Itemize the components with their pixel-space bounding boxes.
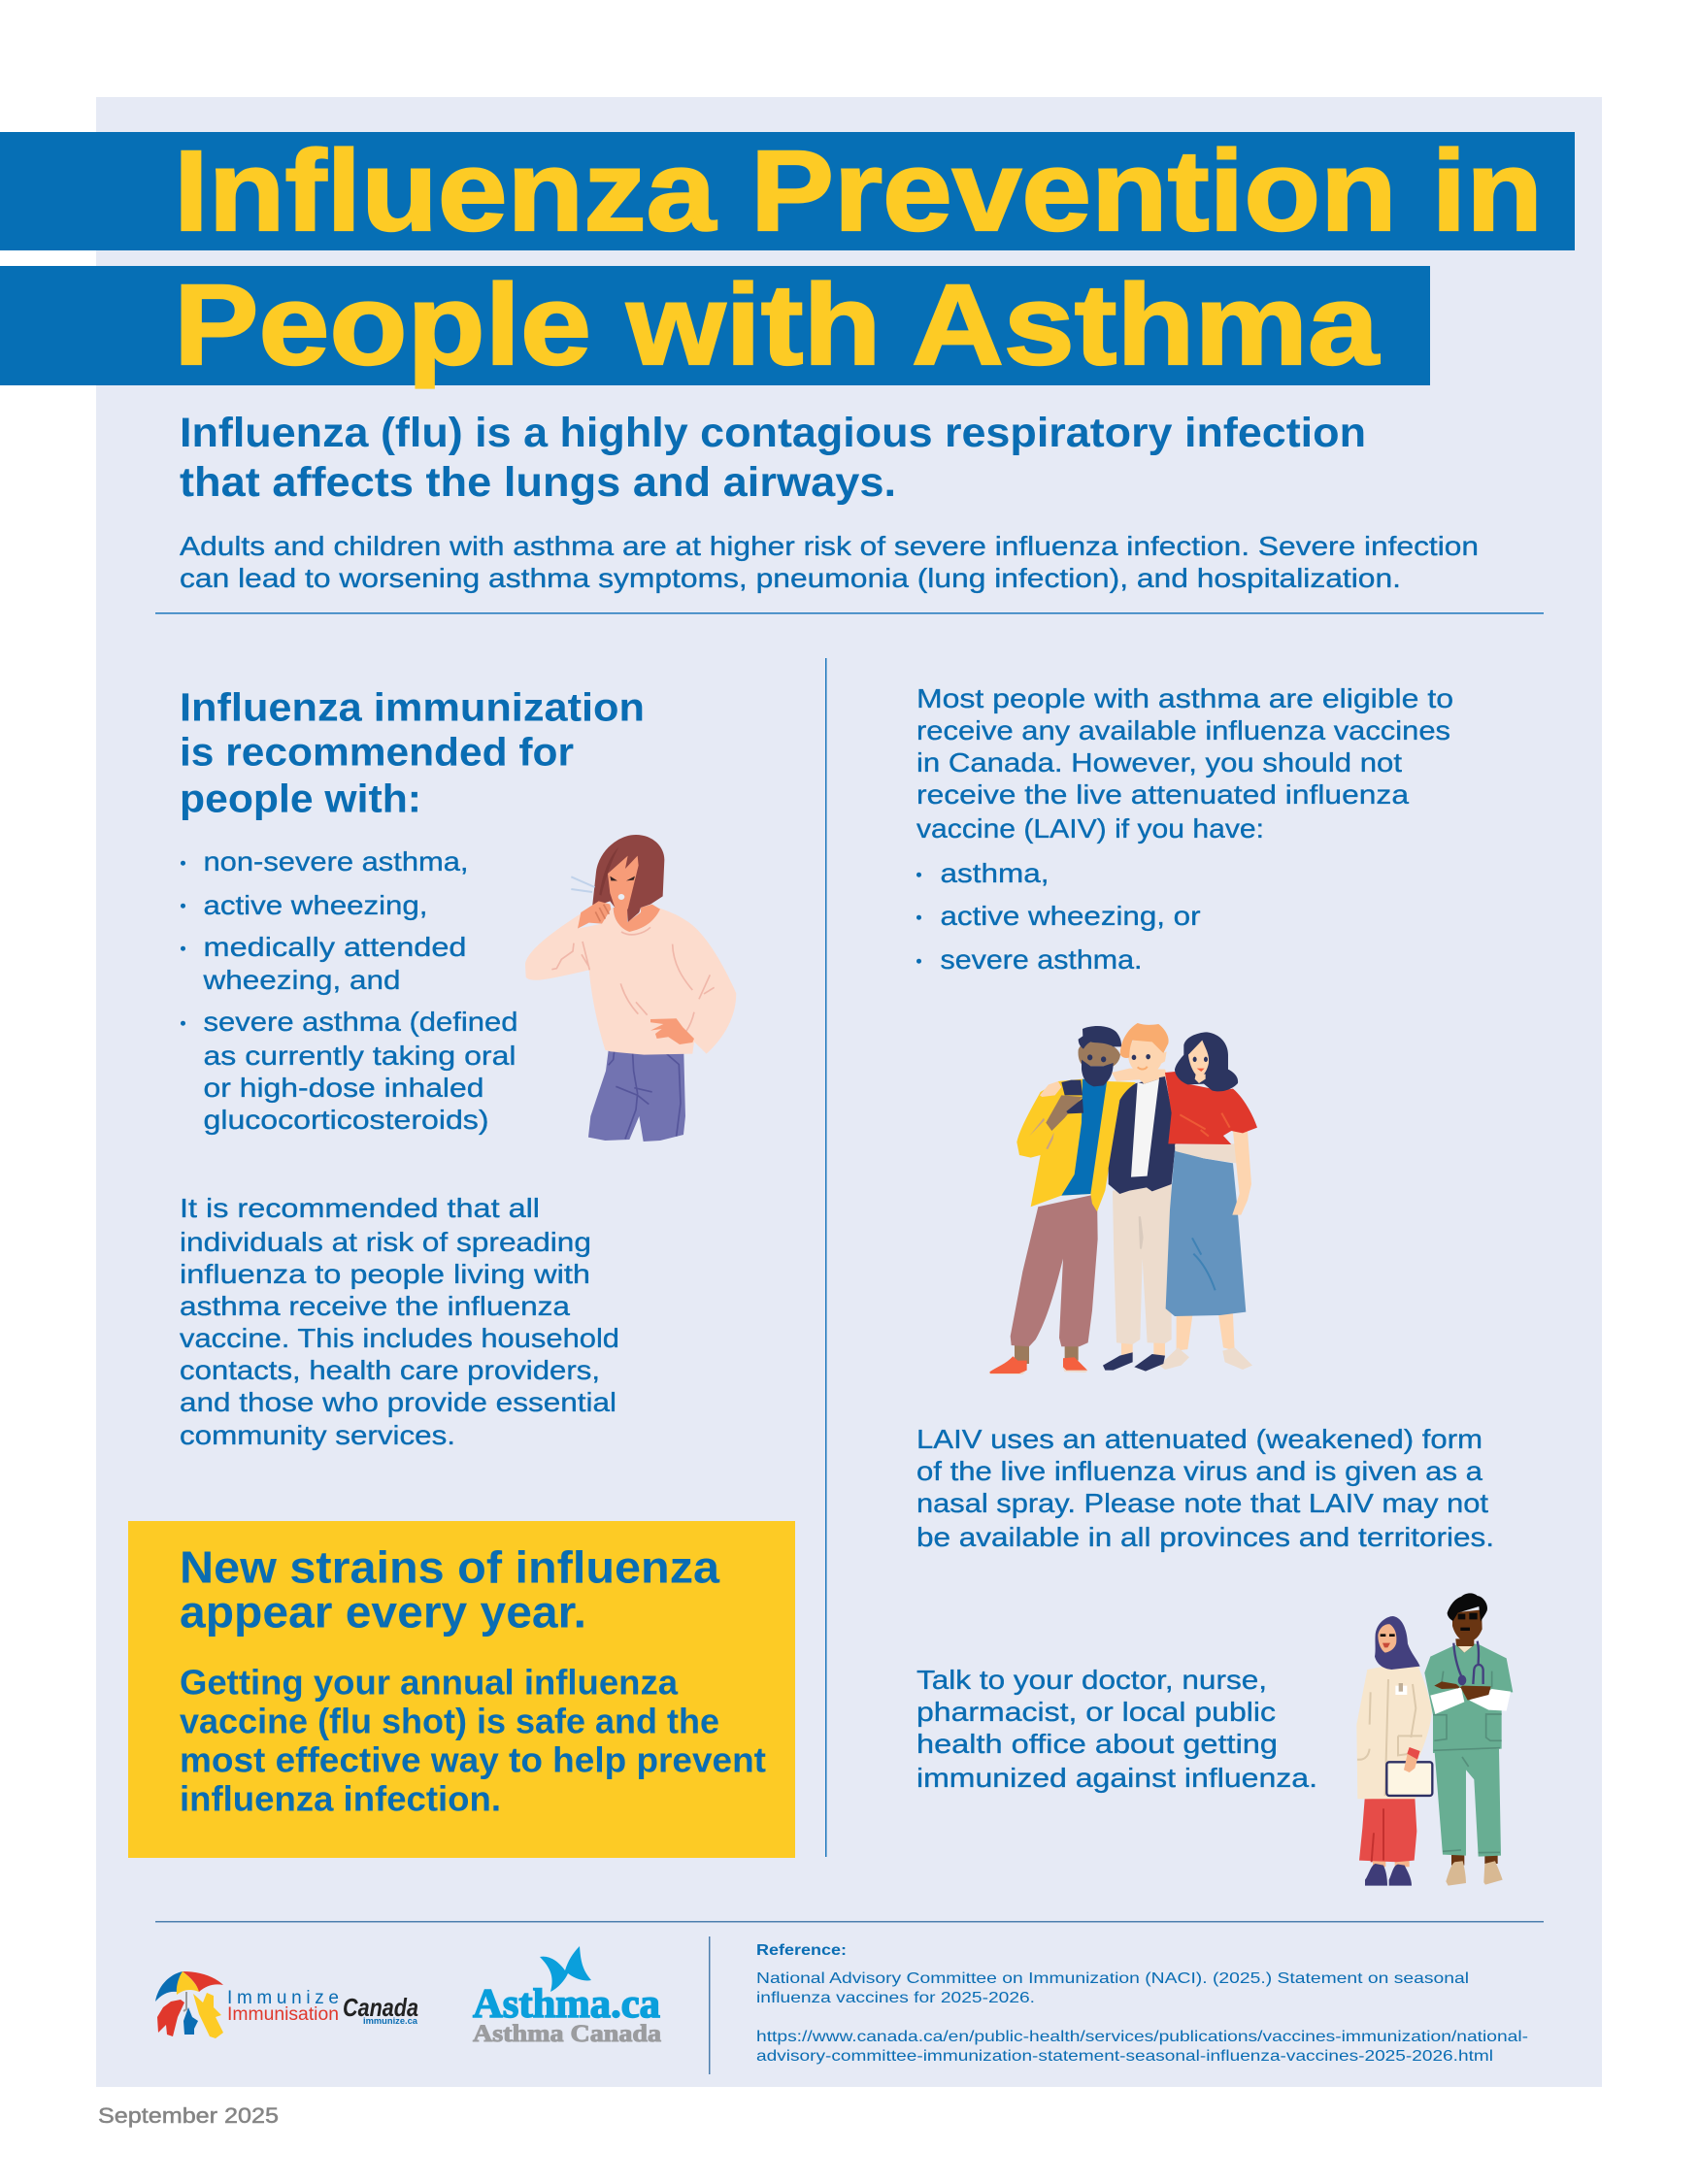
callout: new strains: vaccine (flu shot) is safe and the <box>180 1701 719 1740</box>
callout: new strains: New strains of influenza <box>180 1541 719 1592</box>
paragraph: those spreading influenza: community services. <box>180 1420 455 1450</box>
list: people recommended <box>181 846 518 1135</box>
list: people recommended: medically attended <box>204 932 466 962</box>
title <box>0 127 1575 389</box>
paragraph: about LAIV: be available in all provinces and territories. <box>916 1522 1494 1552</box>
title: People with Asthma <box>174 261 1381 389</box>
paragraph: vaccine eligibility: Most people with asthma are eligible to <box>916 683 1453 713</box>
heading: immunization recommended: is recommended for <box>180 729 574 774</box>
paragraph: vaccine eligibility: in Canada. However, you should not <box>916 747 1402 778</box>
list: people recommended: severe asthma (defined <box>204 1007 518 1037</box>
paragraph: those spreading influenza: contacts, health care providers, <box>180 1355 600 1385</box>
callout: new strains: influenza infection. <box>180 1778 501 1818</box>
callout: new strains <box>128 1521 795 1858</box>
callout: new strains: Getting your annual influenza <box>180 1662 679 1702</box>
logo: Immunize Canada: Immunisation <box>227 2004 339 2025</box>
date: September 2025 <box>98 2103 279 2128</box>
list: LAIV exclusions: asthma, <box>940 858 1049 888</box>
logo: Asthma Canada <box>473 1946 662 2047</box>
list: people recommended: wheezing, and <box>202 965 400 995</box>
reference: advisory-committee-immunization-statement-seasonal-influenza-vaccines-2025-2026.html <box>756 2048 1493 2065</box>
logo: Asthma Canada: Asthma.ca <box>473 1982 660 2027</box>
logo: Immunize Canada <box>155 1971 418 2038</box>
logo: Immunize Canada: Canada <box>343 1993 418 2022</box>
paragraph: vaccine eligibility: vaccine (LAIV) if you have: <box>916 813 1264 844</box>
list: people recommended: active wheezing, <box>204 890 427 920</box>
paragraph: those spreading influenza: It is recommended that all <box>180 1193 540 1223</box>
heading: immunization recommended: Influenza immunization <box>180 684 645 729</box>
paragraph: about LAIV: nasal spray. Please note that LAIV may not <box>916 1488 1488 1518</box>
list: people recommended: non-severe asthma, <box>204 846 468 877</box>
logo: Asthma Canada: Asthma Canada <box>473 2021 662 2047</box>
paragraph: talk to your doctor: pharmacist, or local public <box>916 1697 1276 1727</box>
reference <box>756 1942 1528 2065</box>
heading: immunization recommended: people with: <box>180 776 421 820</box>
reference: Reference: <box>756 1942 847 1959</box>
reference: https://www.canada.ca/en/public-health/services/publications/vaccines-immunization/national- <box>756 2029 1528 2045</box>
paragraph: talk to your doctor: health office about getting <box>916 1729 1278 1759</box>
logo: Immunize Canada: Immunize <box>227 1988 339 2008</box>
paragraph: those spreading influenza: and those who provide essential <box>180 1387 616 1417</box>
subheading <box>180 410 1366 506</box>
paragraph: vaccine eligibility: receive the live attenuated influenza <box>916 779 1409 810</box>
subheading: that affects the lungs and airways. <box>180 459 896 506</box>
list: people recommended: or high-dose inhaled <box>204 1073 483 1103</box>
paragraph: those spreading influenza: influenza to people living with <box>180 1259 590 1289</box>
paragraph: those spreading influenza <box>180 1193 619 1450</box>
callout: new strains: most effective way to help prevent <box>180 1739 766 1779</box>
list: people recommended: glucocorticosteroids) <box>204 1105 489 1135</box>
list: LAIV exclusions <box>916 858 1200 975</box>
paragraph: talk to your doctor: immunized against influenza. <box>916 1763 1317 1793</box>
paragraph: about LAIV <box>916 1424 1494 1552</box>
subheading: Influenza (flu) is a highly contagious respiratory infection <box>180 410 1366 456</box>
icon: coughing woman <box>525 835 736 1142</box>
intro paragraph: Adults and children with asthma are at higher risk of severe influenza infection. Severe infection <box>180 531 1479 561</box>
paragraph: about LAIV: of the live influenza virus and is given as a <box>916 1456 1482 1486</box>
icon: health care workers <box>1356 1593 1513 1886</box>
logo: Immunize Canada: immunize.ca <box>363 2016 418 2026</box>
paragraph: vaccine eligibility <box>916 683 1453 844</box>
paragraph: talk to your doctor: Talk to your doctor, nurse, <box>916 1665 1267 1695</box>
paragraph: those spreading influenza: individuals at risk of spreading <box>180 1227 591 1257</box>
list: LAIV exclusions: active wheezing, or <box>940 901 1200 931</box>
heading: immunization recommended <box>180 684 645 820</box>
reference: National Advisory Committee on Immunization (NACI). (2025.) Statement on seasonal <box>756 1970 1469 1987</box>
reference: influenza vaccines for 2025-2026. <box>756 1990 1035 2006</box>
intro paragraph: can lead to worsening asthma symptoms, pneumonia (lung infection), and hospitalization. <box>180 563 1401 593</box>
list: people recommended: as currently taking oral <box>204 1041 516 1071</box>
icon: three friends <box>988 1023 1257 1374</box>
title: Influenza Prevention in <box>174 127 1543 255</box>
intro paragraph <box>180 531 1479 593</box>
paragraph: those spreading influenza: asthma receive the influenza <box>180 1291 570 1321</box>
list: LAIV exclusions: severe asthma. <box>940 944 1142 975</box>
callout: new strains: appear every year. <box>180 1586 586 1637</box>
paragraph: vaccine eligibility: receive any available influenza vaccines <box>916 715 1450 745</box>
paragraph: talk to your doctor <box>916 1665 1317 1793</box>
paragraph: those spreading influenza: vaccine. This includes household <box>180 1323 619 1353</box>
paragraph: about LAIV: LAIV uses an attenuated (weakened) form <box>916 1424 1482 1454</box>
